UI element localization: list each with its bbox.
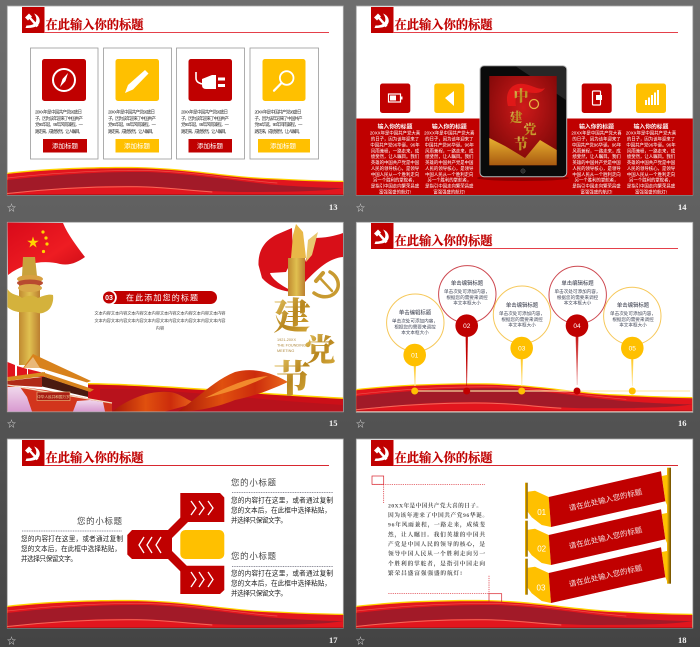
- column 1: 20XX年是中国共产党大喜: [370, 130, 421, 136]
- text block right top: 您的内容打在这里，或者通过复制: [231, 496, 333, 504]
- column 2: [424, 122, 475, 195]
- column 1: 富强强盛的航灯!: [379, 188, 411, 195]
- node 03: 单击次处可添加内容，: [499, 310, 545, 317]
- wave 13: [7, 167, 343, 195]
- header 14: [371, 7, 678, 33]
- node 02: 02: [463, 323, 471, 330]
- header 17: [22, 440, 329, 466]
- ribbon 01: [525, 468, 671, 527]
- column 3: 英雄的中国共产党是中国: [572, 159, 621, 166]
- header 13: [22, 7, 329, 33]
- header 16: 在此输入你的标题: [394, 233, 493, 248]
- node 04: 本文本框大小: [564, 300, 592, 306]
- small english caption: MEETING: [277, 349, 294, 353]
- section body text: 文本内容文本内容文本内容文本内容文本内容文本内容文本内容文本内容: [94, 310, 226, 316]
- column 3: 中国人民从一个胜利走向: [572, 171, 621, 178]
- button 4: 添加标题: [270, 141, 296, 150]
- node 01: 本文本框大小: [401, 329, 429, 336]
- column 1: 绩斐然，让人瞩目。我们: [371, 153, 420, 160]
- card 1: 党96华诞。96年风雨兼程，一: [35, 121, 84, 128]
- tablet screen: 党: [523, 122, 537, 137]
- paragraph: 因为该年迎来了中国共产党96华诞。: [388, 511, 488, 519]
- node 01: [387, 294, 444, 394]
- node 03: [493, 286, 551, 394]
- footer star 13: ☆: [7, 203, 16, 213]
- node 01: 根据您的需要来调控: [394, 323, 436, 330]
- paragraph: [388, 502, 488, 577]
- column 4: 另一个胜利的掌舵者，: [629, 177, 673, 184]
- column 4: 输入你的标题: [634, 122, 669, 130]
- button 1: 添加标题: [52, 141, 78, 150]
- wave 16: [356, 383, 692, 411]
- small english caption: 1921-20XX: [277, 338, 296, 342]
- column 4: 英雄的中国共产党是中国: [627, 159, 676, 166]
- left box: [127, 530, 172, 559]
- node 03: 本文本框大小: [508, 322, 536, 328]
- footer star 15: ☆: [7, 419, 16, 429]
- section pill heading: [101, 290, 217, 305]
- icon: plug: [188, 59, 232, 101]
- page number 14: 14: [678, 202, 687, 212]
- paragraph: 然，让人瞩目。我们英雄的中国共: [388, 530, 485, 539]
- slide 16: timeline circles: [356, 222, 693, 429]
- text block right bottom: [231, 551, 333, 598]
- card 2: 路走来，成绩斐然，让人瞩目。: [108, 128, 156, 135]
- slide 15: section divider: [7, 222, 343, 429]
- column 4: 20XX年是中国共产党大喜: [626, 130, 677, 136]
- column 3: 另一个胜利的掌舵者，: [575, 177, 618, 184]
- column 1: 另一个胜利的掌舵者，: [373, 177, 417, 184]
- node 05: [604, 287, 661, 394]
- ribbon 02: 请在此处输入您的标题: [568, 524, 644, 551]
- node 04: 04: [573, 323, 581, 330]
- gold title 建党节: [274, 296, 336, 401]
- text block right bottom: 您的内容打在这里，或者通过复制: [231, 568, 333, 578]
- ribbon 02: [525, 506, 671, 565]
- node 03: 03: [518, 346, 526, 352]
- card 4: [250, 48, 318, 159]
- column 2: 20XX年是中国共产党大喜: [424, 130, 475, 136]
- slide 13: four icon cards: [7, 6, 343, 213]
- column 2: 中国共产党96华诞。96年: [425, 142, 475, 148]
- text block right bottom: 并选择只保留文字。: [231, 588, 287, 598]
- chevrons right bottom: [191, 572, 213, 587]
- text block left: [21, 516, 123, 563]
- header 16: [371, 223, 678, 249]
- footer star 14: ☆: [356, 203, 365, 213]
- chevrons left: [139, 537, 161, 553]
- slide 14: tablet with four columns: [356, 6, 693, 213]
- column 4: 的日子，因为该年迎来了: [627, 136, 675, 142]
- column 4: [626, 122, 677, 195]
- section pill heading: 在此添加您的标题: [126, 292, 198, 302]
- column 2: 富强强盛的航灯!: [433, 188, 465, 195]
- column 2: 英雄的中国共产党是中国: [425, 159, 474, 166]
- column 3: 输入你的标题: [579, 122, 614, 130]
- column 4: 中国共产党96华诞。96年: [626, 142, 676, 148]
- column 4: 风雨兼程，一路走来，成: [627, 147, 676, 154]
- button 3: 添加标题: [197, 141, 224, 150]
- card 2: 20XX年是中国共产党96盛日: [108, 108, 155, 116]
- gold hammer and sickle: [314, 272, 338, 297]
- card 3: 路走来，成绩斐然，让人瞩目。: [181, 128, 229, 135]
- page number 16: 16: [678, 418, 686, 428]
- orange ribbon: [112, 370, 288, 412]
- column 3: 是指引中国走向繁荣昌盛: [572, 182, 621, 190]
- column 4: 中国人民从一个胜利走向: [627, 171, 675, 178]
- button 2: 添加标题: [124, 141, 150, 150]
- card 3: 党96华诞。96年风雨兼程，一: [181, 121, 230, 128]
- small english caption: THE FOUNDING: [277, 344, 306, 348]
- column 3: 富强强盛的航灯!: [581, 188, 612, 195]
- header 13: 在此输入你的标题: [46, 17, 144, 32]
- card 1: 20XX年是中国共产党96盛日: [35, 108, 82, 116]
- section body text: 内容: [156, 324, 164, 332]
- chevrons right top: [191, 501, 213, 515]
- ribbon 02: 02: [537, 544, 547, 554]
- bottom wave 15: [88, 383, 343, 412]
- column 2: 人民的领导核心，是领导: [425, 165, 474, 172]
- page number 18: 18: [678, 635, 686, 645]
- column 4: 富强强盛的航灯!: [635, 188, 667, 195]
- node 04: 单击编辑标题: [561, 279, 594, 287]
- section pill heading: 03: [105, 295, 113, 302]
- paragraph: 个胜利的掌舵者，是指引中国走向: [388, 559, 485, 568]
- node 05: 本文本框大小: [619, 322, 647, 328]
- top right box: [180, 493, 224, 522]
- footer star 17: ☆: [7, 636, 16, 646]
- page number 15: 15: [329, 418, 338, 428]
- node 02: 单击次处可添加内容，: [444, 288, 490, 295]
- ribbon 03: 请在此处输入您的标题: [568, 562, 644, 589]
- ribbon 01: 01: [537, 508, 547, 517]
- paragraph: 产党是中国人民的领导的核心，是: [388, 540, 485, 549]
- tablet screen: 节: [514, 136, 528, 153]
- icon: battery: [380, 84, 410, 113]
- card 2: 党96华诞。96年风雨兼程，一: [108, 121, 156, 128]
- gold title 建党节: 节: [274, 359, 310, 401]
- header 18: [371, 440, 678, 466]
- node 02: [439, 266, 496, 394]
- footer star 16: ☆: [356, 419, 365, 429]
- card 3: [176, 48, 244, 159]
- bottom right box: [180, 566, 224, 594]
- text block right bottom: 您的小标题: [231, 551, 277, 561]
- page number 13: 13: [329, 202, 338, 212]
- card 4: 20XX年是中国共产党96盛日: [254, 108, 302, 116]
- ribbon 03: 03: [537, 584, 546, 592]
- timeline line: [415, 390, 690, 392]
- column 2: 风雨兼程，一路走来，成: [425, 147, 474, 154]
- column 1: 中国共产党96华诞。96年: [370, 142, 420, 148]
- slide 18: paragraph and ribbons: [356, 439, 693, 646]
- card 4: 党96华诞。96年风雨兼程，一: [254, 121, 303, 128]
- node 02: 根据您的需要来调控: [446, 294, 488, 301]
- page number 17: 17: [329, 635, 338, 645]
- header 17: 在此输入你的标题: [46, 450, 144, 465]
- node 04: [549, 266, 606, 394]
- node 02: 单击编辑标题: [451, 279, 484, 287]
- card 1: [30, 48, 98, 159]
- icon: signal bars: [636, 84, 666, 113]
- gold title 建党节: 建: [274, 296, 310, 338]
- column 2: 中国人民从一个胜利走向: [425, 171, 473, 178]
- yellow box: [180, 530, 224, 559]
- tiananmen gate: 中华人民共和国万岁: [37, 394, 70, 399]
- paragraph: 领导中国人民从一个胜利走向另一: [388, 550, 485, 558]
- text block right top: 并选择只保留文字。: [231, 516, 287, 524]
- icon: magnifier: [262, 59, 306, 101]
- text block left: 您的小标题: [77, 516, 123, 526]
- column 1: 英雄的中国共产党是中国: [371, 159, 420, 166]
- tablet screen: 中: [513, 87, 529, 105]
- node 01: 单击编辑标题: [399, 308, 432, 316]
- column 2: 的日子，因为该年迎来了: [425, 136, 473, 142]
- card 2: [104, 48, 172, 159]
- column 1: 风雨兼程，一路走来，成: [371, 147, 420, 154]
- footer star 18: ☆: [356, 636, 365, 646]
- icon: speaker: [434, 84, 464, 113]
- column 1: 人民的领导核心，是领导: [371, 165, 420, 172]
- column 1: 是指引中国走向繁荣昌盛: [371, 182, 420, 190]
- card 2: 子，因为该年迎来了中国共产: [108, 115, 156, 122]
- column 3: 中国共产党96华诞。96年: [572, 142, 622, 148]
- paragraph: 96年风雨兼程，一路走来，成绩斐: [388, 521, 485, 530]
- text block left: 并选择只保留文字。: [21, 554, 77, 563]
- icon: compass: [42, 59, 86, 101]
- column 3: 风雨兼程，一路走来，成: [572, 147, 621, 154]
- node 05: 根据您的需要来调控: [612, 316, 654, 323]
- node 01: 单击次处可添加内容，: [392, 318, 438, 324]
- section body text: 文本内容文本内容文本内容文本内容文本内容文本内容文本内容文本内容: [94, 317, 226, 324]
- node 03: 单击编辑标题: [506, 301, 539, 309]
- red band: [356, 118, 693, 195]
- paragraph: 繁荣昌盛富强强盛的航灯!: [388, 569, 462, 577]
- column 1: 中国人民从一个胜利走向: [371, 171, 419, 178]
- column 2: 是指引中国走向繁荣昌盛: [425, 182, 474, 190]
- icon: pencil: [116, 59, 159, 101]
- column 4: 是指引中国走向繁荣昌盛: [627, 182, 676, 190]
- column 3: 20XX年是中国共产党大喜: [571, 130, 622, 136]
- column 3: 的日子，因为该年迎来了: [572, 136, 621, 142]
- wave 18: [356, 600, 692, 628]
- card 3: 20XX年是中国共产党96盛日: [181, 108, 228, 116]
- header 18: 在此输入你的标题: [394, 450, 493, 465]
- column 1: [370, 122, 421, 195]
- column 2: 另一个胜利的掌舵者，: [427, 177, 471, 184]
- dashed frame top: [372, 476, 485, 503]
- huabiao with red ribbon right: [258, 224, 343, 296]
- node 04: 根据您的需要来调控: [557, 294, 599, 301]
- node 05: 05: [629, 346, 636, 352]
- card 4: 子，因为该年迎来了中国共产: [254, 115, 303, 122]
- section body text: [94, 310, 226, 332]
- header 14: 在此输入你的标题: [394, 17, 493, 32]
- column 4: 人民的领导核心，是领导: [627, 165, 676, 172]
- tablet screen: [489, 76, 557, 165]
- column 4: 绩斐然，让人瞩目。我们: [627, 153, 676, 160]
- ribbon 03: [525, 544, 671, 603]
- text block left: 您的内容打在这里，或者通过复制: [21, 534, 123, 543]
- column 2: 输入你的标题: [432, 122, 467, 130]
- node 05: 单击次处可添加内容，: [610, 310, 656, 317]
- card 4: 路走来，成绩斐然，让人瞩目。: [254, 128, 302, 135]
- tablet screen: 建: [509, 110, 523, 125]
- column 3: 人民的领导核心，是领导: [572, 165, 621, 172]
- slide 17: branching diagram: [7, 439, 343, 646]
- column 3: [571, 122, 622, 195]
- text block right top: [231, 478, 333, 524]
- column 1: 的日子，因为该年迎来了: [371, 136, 419, 142]
- text block right top: 您的文本后，在此框中选择粘贴，: [231, 506, 331, 514]
- gold title 建党节: 党: [304, 333, 336, 368]
- icon: phone: [582, 84, 612, 113]
- column 3: 绩斐然，让人瞩目。我们: [572, 153, 621, 160]
- card 3: 子，因为该年迎来了中国共产: [181, 115, 230, 122]
- text block right top: 您的小标题: [231, 478, 277, 488]
- national flag: [8, 222, 85, 275]
- dashed frame bottom: [388, 576, 502, 602]
- wave 17: [7, 600, 343, 628]
- text block left: 您的文本后，在此框中选择粘贴，: [21, 544, 121, 553]
- column 2: 绩斐然，让人瞩目。我们: [425, 153, 474, 160]
- card 1: 路走来，成绩斐然，让人瞩目。: [35, 128, 83, 135]
- tablet: [477, 66, 569, 181]
- small english caption: [277, 338, 306, 353]
- paragraph: 20XX年是中国共产党大喜的日子。: [388, 502, 482, 510]
- tiananmen gate: [8, 354, 112, 412]
- node 05: 单击编辑标题: [617, 301, 650, 309]
- huabiao column left: [8, 257, 53, 365]
- node 02: 本文本框大小: [453, 300, 481, 306]
- branch diagram: [127, 493, 224, 594]
- node 03: 根据您的需要来调控: [501, 316, 543, 323]
- node 01: 01: [411, 352, 419, 360]
- card 1: 子，因为该年迎来了中国共产: [35, 115, 84, 122]
- text block right bottom: 您的文本后，在此框中选择粘贴，: [231, 578, 331, 588]
- ribbon 01: 请在此处输入您的标题: [568, 486, 644, 513]
- column 1: 输入你的标题: [378, 122, 413, 130]
- node 04: 单击次处可添加内容，: [555, 288, 600, 295]
